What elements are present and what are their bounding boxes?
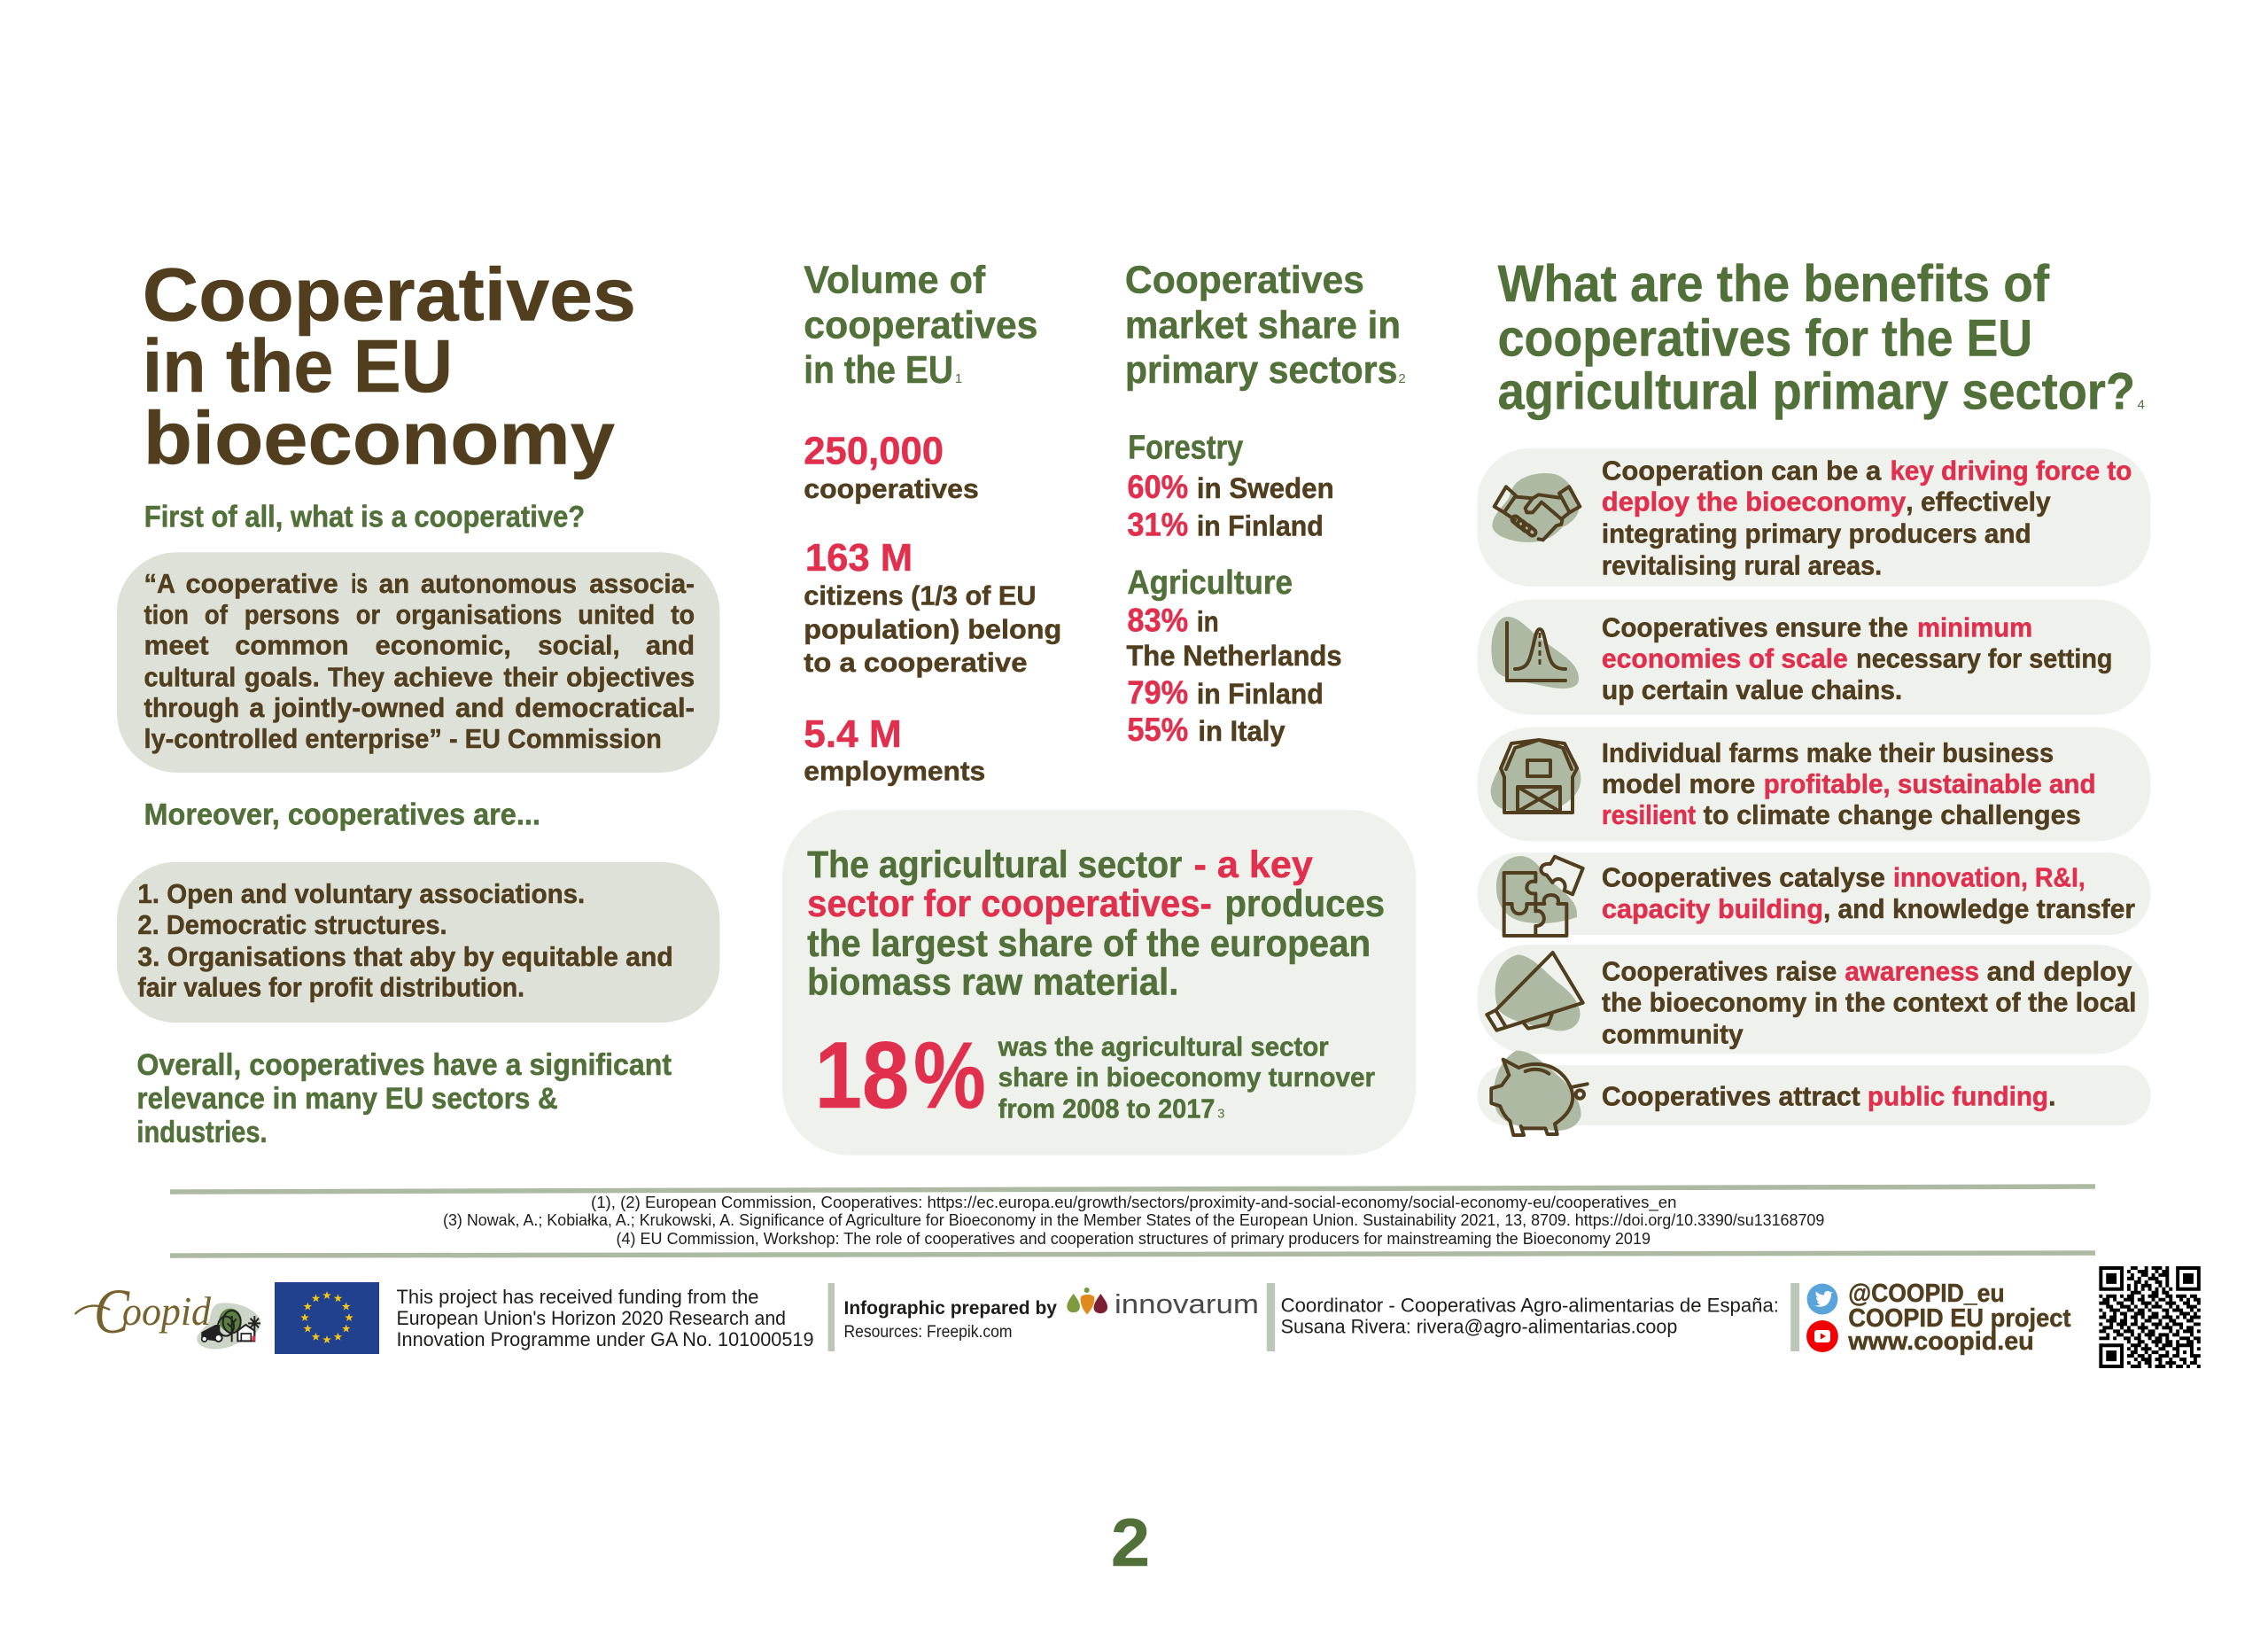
benefit text: awareness [1845, 956, 1979, 987]
stat: 5.4 M employments: employments [804, 755, 985, 786]
logo: innovarum: innovarum [1115, 1288, 1259, 1319]
quote line 2: united [578, 599, 655, 630]
benefit text [1602, 455, 2132, 580]
stat: 250,000 cooperatives [804, 430, 979, 504]
benefit text: key driving force to [1890, 455, 2132, 486]
benefit text: Cooperatives raise [1602, 956, 1837, 987]
heading: volume of cooperatives: in the EU [804, 348, 953, 392]
benefit text: revitalising rural areas. [1602, 549, 1882, 580]
credit: infographic prepared by [843, 1298, 1057, 1342]
quote line 3: meet [144, 630, 209, 661]
benefit text: Cooperatives catalyse [1602, 862, 1885, 893]
credit: infographic prepared by: Infographic prepared by [843, 1298, 1057, 1319]
stat group: agriculture: in [1197, 605, 1219, 638]
benefit text: , effectively [1906, 486, 2051, 517]
heading: market share: market share in [1125, 303, 1401, 346]
title [143, 253, 636, 480]
quote line 1: is [351, 568, 368, 599]
quote line 3: economic, [375, 630, 511, 661]
big number 18% [815, 1023, 986, 1128]
heading: benefits: agricultural primary sector? [1498, 364, 2135, 421]
panel: benefit 6 public funding [1478, 1051, 2151, 1135]
benefit text: necessary for setting [1856, 642, 2112, 673]
stat group: forestry [1127, 430, 1334, 542]
quote line 2: persons [245, 599, 339, 630]
stat group: forestry: 60% [1127, 469, 1188, 505]
page number: 2 [1111, 1506, 1150, 1581]
funding statement: Innovation Programme under GA No. 101000519 [397, 1328, 813, 1350]
turnover text [998, 1031, 1375, 1124]
benefit text: to climate change challenges [1704, 799, 2081, 830]
heading: benefits [1498, 256, 2145, 421]
stat: 163 M citizens: population) belong [804, 614, 1061, 645]
panel heading [807, 844, 1385, 1004]
benefit text: up certain value chains. [1602, 674, 1902, 705]
quote line 5: through [144, 692, 239, 723]
panel: list of cooperative features: 1. Open and voluntary associations. [137, 878, 585, 909]
benefit text: Cooperatives ensure the [1602, 611, 1908, 642]
title: Cooperatives [143, 253, 636, 337]
stat: 5.4 M employments [804, 712, 985, 786]
panel heading: biomass raw material. [807, 961, 1178, 1004]
panel: list of cooperative features [117, 862, 719, 1023]
heading: moreover: Moreover, cooperatives are... [144, 798, 540, 832]
stat group: forestry: 31% [1127, 506, 1188, 542]
quote line 5 [144, 692, 695, 723]
logo: Coopid: oopid [122, 1288, 212, 1334]
stat: 163 M citizens: to a cooperative [804, 647, 1028, 678]
benefit text: Cooperation can be a [1602, 455, 1882, 486]
turnover text: share in bioeconomy turnover [998, 1062, 1375, 1093]
icon: youtube [1806, 1320, 1838, 1352]
benefit text: capacity building [1602, 893, 1823, 924]
icon: twitter [1807, 1283, 1837, 1315]
quote line 6: ly-controlled enterprise” - EU Commission [144, 723, 662, 754]
stat group: agriculture: Agriculture [1127, 564, 1293, 602]
benefit text: Cooperatives attract [1602, 1081, 1860, 1112]
footnotes [443, 1194, 1824, 1248]
quote line 1: associa- [589, 568, 695, 599]
stat: 163 M citizens: 163 M [805, 536, 913, 580]
quote line 1: an [379, 568, 409, 599]
stat group: agriculture: in Finland [1197, 677, 1324, 710]
benefit text [1602, 737, 2096, 830]
stat group: agriculture: The Netherlands [1126, 639, 1342, 672]
panel: benefit 2 economies of scale [1478, 600, 2151, 715]
title: in the EU [143, 323, 453, 408]
heading: market share [1125, 259, 1406, 392]
heading: volume of cooperatives: Volume of [804, 259, 986, 302]
benefit text [1602, 1081, 2056, 1112]
logo: innovarum [1067, 1288, 1259, 1319]
icon: barn [1491, 739, 1581, 813]
big number 18%: 18 [815, 1023, 909, 1128]
benefit text: and deploy [1987, 956, 2132, 987]
social handles [1847, 1280, 2071, 1356]
panel: list of cooperative features: 3. Organisations that aby by equitable and [137, 941, 673, 972]
stat group: agriculture [1126, 564, 1342, 748]
quote line 3 [144, 630, 695, 661]
quote line 5: and [455, 692, 504, 723]
stat: 163 M citizens: citizens (1/3 of EU [804, 580, 1036, 611]
text block: overall relevance: industries. [136, 1116, 268, 1149]
turnover text: was the agricultural sector [998, 1031, 1329, 1062]
quote line 2: of [205, 599, 229, 630]
panel: benefit 4 innovation [1478, 852, 2151, 936]
heading: market share: Cooperatives [1125, 259, 1364, 302]
benefit text: , and knowledge transfer [1823, 893, 2135, 924]
footnotes: (4) EU Commission, Workshop: The role of cooperatives and cooperation structures of primary producers for mainstreaming the Bioeconomy 2019 [617, 1230, 1651, 1248]
panel: benefit 3 profitable farms [1478, 728, 2151, 841]
funding statement: European Union's Horizon 2020 Research and [397, 1307, 786, 1329]
quote line 2: to [671, 599, 695, 630]
icon: EU flag [275, 1282, 379, 1354]
stat group: forestry: in Finland [1197, 509, 1324, 541]
stat group: agriculture: 83% [1127, 603, 1188, 639]
quote line 4: achieve [393, 661, 493, 692]
stat: 250,000 cooperatives: 250,000 [804, 430, 944, 473]
credit: infographic prepared by: Resources: Freepik.com [843, 1323, 1012, 1342]
stat group: agriculture: 79% [1127, 674, 1188, 711]
heading: benefits: cooperatives for the EU [1498, 311, 2032, 368]
quote line 3: social, [538, 630, 620, 661]
heading: volume of cooperatives: 1 [955, 371, 962, 386]
stat group: agriculture: in Italy [1198, 714, 1285, 747]
coordinator contact [1281, 1294, 1779, 1338]
benefit text: the bioeconomy in the context of the local [1602, 987, 2137, 1018]
benefit text [1602, 862, 2135, 924]
footnotes: (3) Nowak, A.; Kobiałka, A.; Krukowski, A. Significance of Agriculture for Bioeconomy in the Member States of the European Union. Sustainability 2021, 13, 8709. https://doi.org/10.3390/su13168709 [443, 1211, 1824, 1229]
panel heading: sector for cooperatives- [807, 883, 1212, 925]
panel: definition quote [117, 552, 719, 773]
quote line 1: autonomous [421, 568, 577, 599]
quote line 1: cooperative [186, 568, 338, 599]
icon: bell curve chart [1491, 617, 1579, 689]
QR code [2099, 1266, 2201, 1368]
benefit text: Individual farms make their business [1602, 737, 2054, 768]
icon: piggy bank [1491, 1051, 1588, 1135]
panel heading: - a key [1194, 844, 1313, 886]
funding statement: This project has received funding from the [397, 1286, 758, 1308]
social handles: @COOPID_eu [1848, 1280, 2005, 1308]
quote line 4: cultural [144, 661, 236, 692]
stat group: agriculture: 55% [1127, 712, 1188, 748]
quote line 5: a [249, 692, 265, 723]
heading: what is a cooperative: First of all, what is a cooperative? [144, 500, 585, 533]
panel: list of cooperative features: 2. Democratic structures. [137, 909, 447, 940]
benefit text [1602, 956, 2137, 1049]
benefit text: innovation, R&I, [1893, 862, 2085, 893]
heading: volume of cooperatives [804, 259, 1037, 392]
social handles: COOPID EU project [1848, 1304, 2071, 1333]
quote line 4: their [503, 661, 558, 692]
benefit text: profitable, sustainable and [1764, 768, 2096, 799]
stat: 5.4 M employments: 5.4 M [804, 712, 902, 756]
benefit text: resilient [1602, 799, 1696, 830]
heading: market share: primary sectors [1125, 348, 1397, 392]
benefit text: deploy the bioeconomy [1602, 486, 1907, 517]
funding statement [397, 1286, 813, 1350]
text block: overall relevance [136, 1048, 672, 1149]
turnover text: 3 [1217, 1107, 1224, 1122]
icon: puzzle [1496, 856, 1583, 936]
text block: overall relevance: Overall, cooperatives have a significant [136, 1048, 672, 1082]
text block: overall relevance: relevance in many EU sectors & [136, 1082, 558, 1116]
heading: benefits: 4 [2138, 398, 2145, 413]
quote line 5: democratical- [515, 692, 695, 723]
turnover text: from 2008 to 2017 [998, 1093, 1215, 1124]
quote line 2 [144, 599, 695, 630]
benefit text: community [1602, 1018, 1744, 1049]
logo: Coopid: C [94, 1276, 130, 1347]
quote line 4: They [328, 661, 384, 692]
heading: benefits: What are the benefits of [1498, 256, 2050, 313]
quote line 2: tion [144, 599, 189, 630]
heading: market share: 2 [1398, 371, 1406, 386]
quote line 4: goals. [245, 661, 320, 692]
logo: Coopid [71, 1276, 260, 1349]
panel: list of cooperative features: fair values for profit distribution. [137, 972, 524, 1003]
benefit text: model more [1602, 768, 1755, 799]
quote line 1 [144, 568, 695, 599]
benefit text: public funding [1868, 1081, 2048, 1112]
social handles: www.coopid.eu [1847, 1327, 2034, 1356]
quote line 5: jointly-owned [273, 692, 445, 723]
big number 18%: % [913, 1023, 986, 1128]
panel: agricultural sector [782, 810, 1416, 1155]
panel heading: the largest share of the european [807, 922, 1371, 965]
quote line 4: objectives [566, 661, 695, 692]
benefit text [1602, 611, 2112, 705]
coordinator contact: Coordinator - Cooperativas Agro-alimentarias de España: [1281, 1294, 1779, 1317]
icon: megaphone [1487, 953, 1583, 1031]
quote line 4 [144, 661, 695, 692]
stat: 250,000 cooperatives: cooperatives [804, 473, 979, 504]
quote line 3: and [646, 630, 695, 661]
panel: benefit 5 awareness [1478, 945, 2149, 1054]
stat group: forestry: Forestry [1128, 430, 1243, 467]
panel heading: The agricultural sector [807, 844, 1182, 886]
benefit text: minimum [1917, 611, 2032, 642]
panel: benefit 1 driving force [1478, 448, 2151, 587]
quote line 2: or [356, 599, 380, 630]
benefit text: economies of scale [1602, 642, 1848, 673]
quote line 3: common [235, 630, 349, 661]
benefit text: . [2048, 1081, 2056, 1112]
panel heading: produces [1224, 883, 1385, 925]
benefit text: integrating primary producers and [1602, 518, 2031, 549]
heading: volume of cooperatives: cooperatives [804, 303, 1037, 346]
coordinator contact: Susana Rivera: rivera@agro-alimentarias.coop [1281, 1315, 1677, 1338]
quote line 2: organisations [396, 599, 562, 630]
stat group: forestry: in Sweden [1197, 471, 1334, 504]
stat: 163 M citizens [804, 536, 1061, 678]
icon: handshake [1492, 473, 1580, 542]
title: bioeconomy [144, 396, 615, 480]
footnotes: (1), (2) European Commission, Cooperatives: https://ec.europa.eu/growth/sectors/proximity-and-social-economy/social-economy-eu/cooperatives_en [591, 1194, 1676, 1212]
quote line 1: “A [144, 568, 175, 599]
